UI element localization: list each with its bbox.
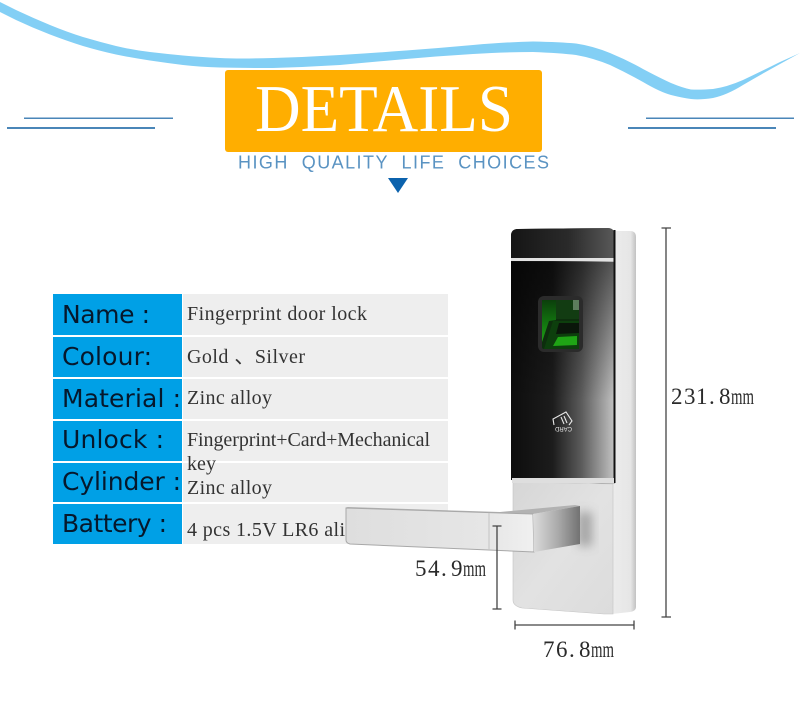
value: unlock: key: [187, 453, 216, 475]
row: unlock: Unlock :: [62, 425, 164, 454]
row: material: Material :: [62, 384, 181, 413]
dimension: width 76.8mm: 76.8: [543, 637, 590, 662]
decorative lines right: [628, 118, 794, 129]
row: battery: [53, 504, 448, 544]
row: battery: Battery :: [62, 509, 167, 538]
row: material: [53, 379, 448, 419]
dimension: handle 54.9mm: [415, 526, 502, 609]
back plate: [600, 231, 636, 614]
row: colour: Gold 、Silver: [187, 346, 305, 368]
value: unlock: Fingerprint+Card+Mechanical: [187, 429, 430, 451]
lower plate: [513, 482, 613, 614]
row: material: Zinc alloy: [187, 387, 272, 409]
handle: [346, 505, 580, 552]
value: cylinder: Zinc alloy: [187, 477, 272, 499]
dimension: handle 54.9mm: 54.9: [415, 556, 462, 581]
dimension: width 76.8mm: [515, 620, 634, 662]
dimension: handle 54.9mm: mm: [463, 556, 486, 581]
subtitle: HIGH QUALITY LIFE CHOICES: [238, 152, 549, 172]
value: unlock: [187, 429, 430, 475]
icon: down triangle: [388, 178, 408, 193]
row: colour: Colour:: [62, 342, 152, 371]
dimension: height 231.8mm: mm: [731, 384, 754, 409]
fingerprint sensor: [538, 296, 583, 352]
row: battery: 4 pcs 1.5V LR6 ali: [187, 519, 345, 541]
title: DETAILS: [255, 72, 513, 146]
icon: card reader: CARD: [554, 425, 572, 431]
row: name: [53, 294, 448, 335]
row: cylinder: [53, 463, 448, 502]
row: colour: [53, 337, 448, 377]
dimension: height 231.8mm: 231.8: [671, 384, 730, 409]
row: name: Name :: [62, 300, 150, 329]
handle shadow: [578, 512, 592, 546]
row: cylinder: Cylinder :: [62, 467, 181, 496]
dimension: width 76.8mm: mm: [591, 637, 614, 662]
row: unlock: [53, 421, 448, 461]
icon: card reader: [553, 412, 572, 431]
door lock product: [346, 228, 636, 614]
decorative wave: [0, 2, 800, 99]
dimension: height 231.8mm: [662, 228, 754, 617]
specification table: [53, 294, 448, 544]
decorative lines left: [7, 118, 173, 129]
black panel: [511, 228, 616, 484]
row: name: Fingerprint door lock: [187, 303, 367, 325]
title banner: [225, 70, 542, 152]
